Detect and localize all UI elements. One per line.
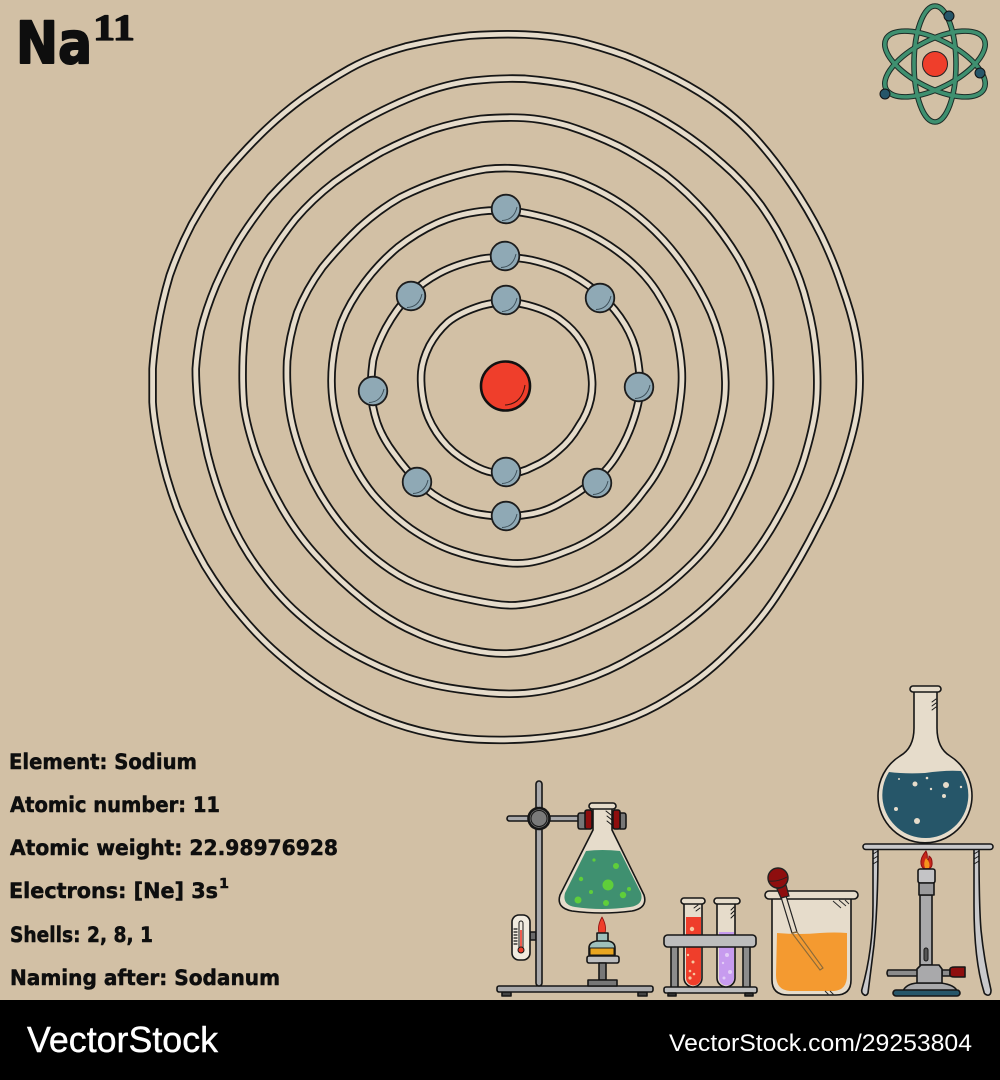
dropper xyxy=(768,868,823,970)
element facts text: 1 xyxy=(219,877,229,892)
electrons xyxy=(359,195,653,530)
watermark footer bar: VectorStock xyxy=(27,1019,219,1060)
electron shells diagram xyxy=(153,34,860,740)
orange liquid xyxy=(776,932,847,991)
rack top bar xyxy=(664,935,756,947)
ring stand with conical flask and spirit burner xyxy=(497,781,653,996)
element facts text: Atomic weight: 22.98976928 xyxy=(10,836,338,860)
spirit burner xyxy=(587,917,619,986)
tripod with round flask and Bunsen burner xyxy=(862,686,993,996)
inner shells xyxy=(371,257,640,517)
watermark footer bar xyxy=(0,1000,1000,1080)
beaker with orange liquid and dropper xyxy=(765,868,858,995)
element symbol: Na 11: 11 xyxy=(93,8,135,49)
element symbol: Na 11: Na xyxy=(16,9,92,77)
beaker lip xyxy=(765,891,858,899)
beaker hatch marks xyxy=(825,900,849,995)
round flask xyxy=(878,686,972,843)
element facts text: Element: Sodium xyxy=(9,750,197,774)
watermark footer bar: VectorStock.com/29253804 xyxy=(669,1030,972,1057)
tripod stand xyxy=(862,844,993,995)
Bunsen burner xyxy=(887,851,965,996)
element facts text: Naming after: Sodanum xyxy=(10,966,280,990)
stand rods and clamp xyxy=(507,781,581,986)
nucleus xyxy=(481,362,530,410)
outer shells xyxy=(153,34,860,740)
red test tube xyxy=(681,898,705,987)
thermometer xyxy=(512,915,536,960)
element facts text xyxy=(9,750,338,990)
purple test tube xyxy=(714,898,740,987)
icon: atom xyxy=(875,6,995,122)
test tube rack xyxy=(664,898,757,996)
stand base xyxy=(497,986,653,996)
beaker glass xyxy=(772,897,851,995)
element facts text: Electrons: [Ne] 3s xyxy=(9,879,218,903)
element facts text: Atomic number: 11 xyxy=(10,793,220,817)
element facts text: Shells: 2, 8, 1 xyxy=(10,923,153,947)
rack base and posts xyxy=(664,946,757,996)
conical flask xyxy=(559,803,645,913)
